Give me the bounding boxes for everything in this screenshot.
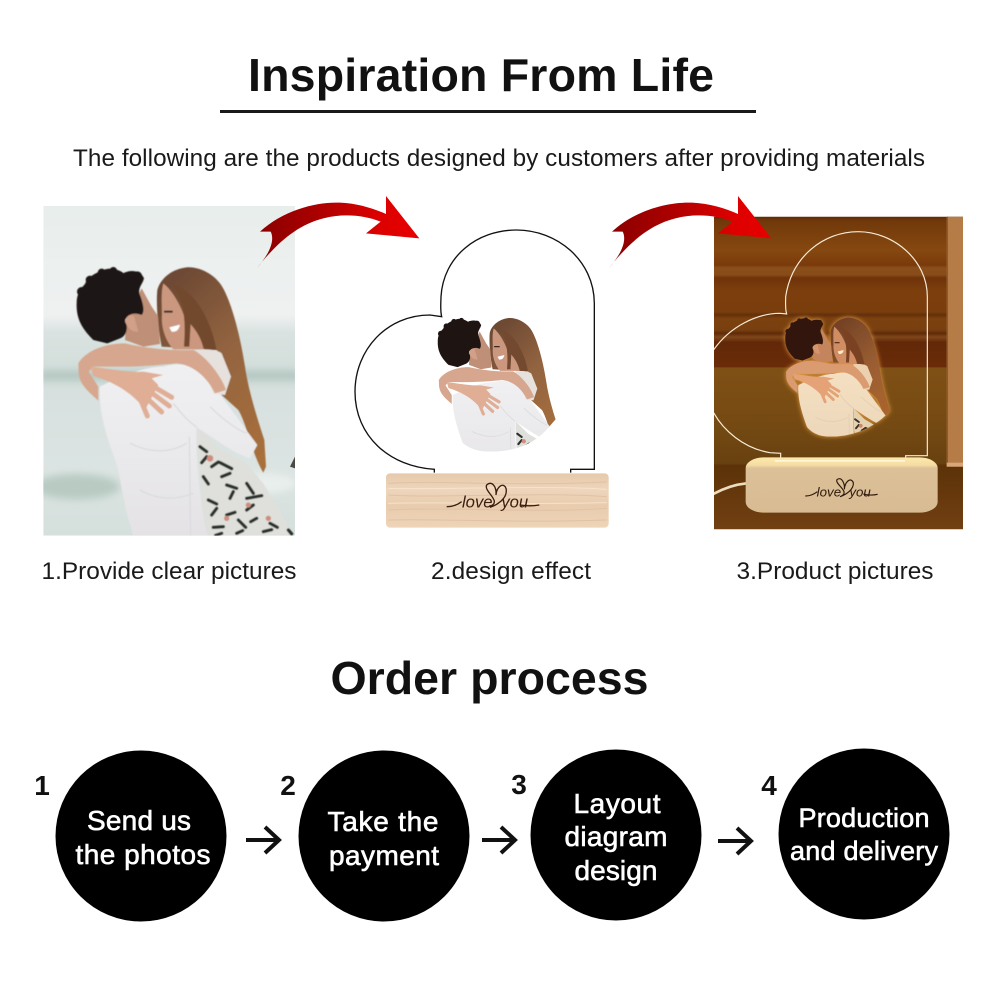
heart outline lit: [703, 232, 927, 461]
step 4: Production: [798, 803, 930, 833]
caption 1: 1.Provide clear pictures: [42, 558, 296, 585]
engraved love you: you: [848, 485, 871, 500]
arrow: step 1 to 2: [257, 196, 419, 268]
step 1: 1: [34, 770, 50, 801]
step 2: Take the: [328, 806, 438, 837]
step 4: [761, 748, 950, 920]
step 2: [280, 750, 470, 922]
engraved love you: [805, 479, 878, 500]
couple cut-out: [438, 318, 556, 452]
subtitle: The following are the products designed by customers after providing materials: [73, 145, 925, 172]
room background: [714, 217, 963, 529]
engraved love you: you: [500, 492, 528, 511]
arrow 2: [482, 827, 515, 853]
engraved love you: [447, 483, 539, 511]
step 1: Send us: [87, 805, 191, 836]
caption 2: 2.design effect: [431, 558, 591, 585]
heading: order process: Order process: [330, 652, 648, 704]
title: Inspiration From Life: [248, 49, 714, 101]
step 2: payment: [329, 840, 439, 871]
panel: customer photo: [33, 206, 300, 536]
engraved love you: love: [817, 485, 841, 500]
heart outline: [355, 230, 594, 473]
step 3: 3: [511, 769, 527, 800]
caption 3: 3.Product pictures: [736, 558, 934, 585]
step 4: and delivery: [790, 836, 938, 866]
title rule: [220, 110, 756, 113]
picture frame: [947, 217, 963, 467]
panel: design effect: [355, 230, 609, 528]
step 3: Layout: [574, 788, 661, 819]
engraved love you: love: [462, 492, 493, 511]
step 2: 2: [280, 770, 296, 801]
cable: [713, 483, 747, 494]
step 3: [511, 750, 702, 920]
step 1: [34, 750, 226, 922]
lamp base: [746, 457, 938, 513]
step 3: design: [574, 855, 658, 886]
arrow 3: [718, 828, 751, 854]
arrow: step 2 to 3: [609, 196, 771, 268]
step 1: the photos: [76, 839, 210, 870]
step 4: 4: [761, 770, 777, 801]
glowing couple: [782, 314, 892, 440]
panel: product picture: [703, 217, 963, 529]
arrow 1: [246, 827, 279, 853]
wooden base: [386, 473, 609, 528]
step 3: diagram: [564, 821, 668, 852]
